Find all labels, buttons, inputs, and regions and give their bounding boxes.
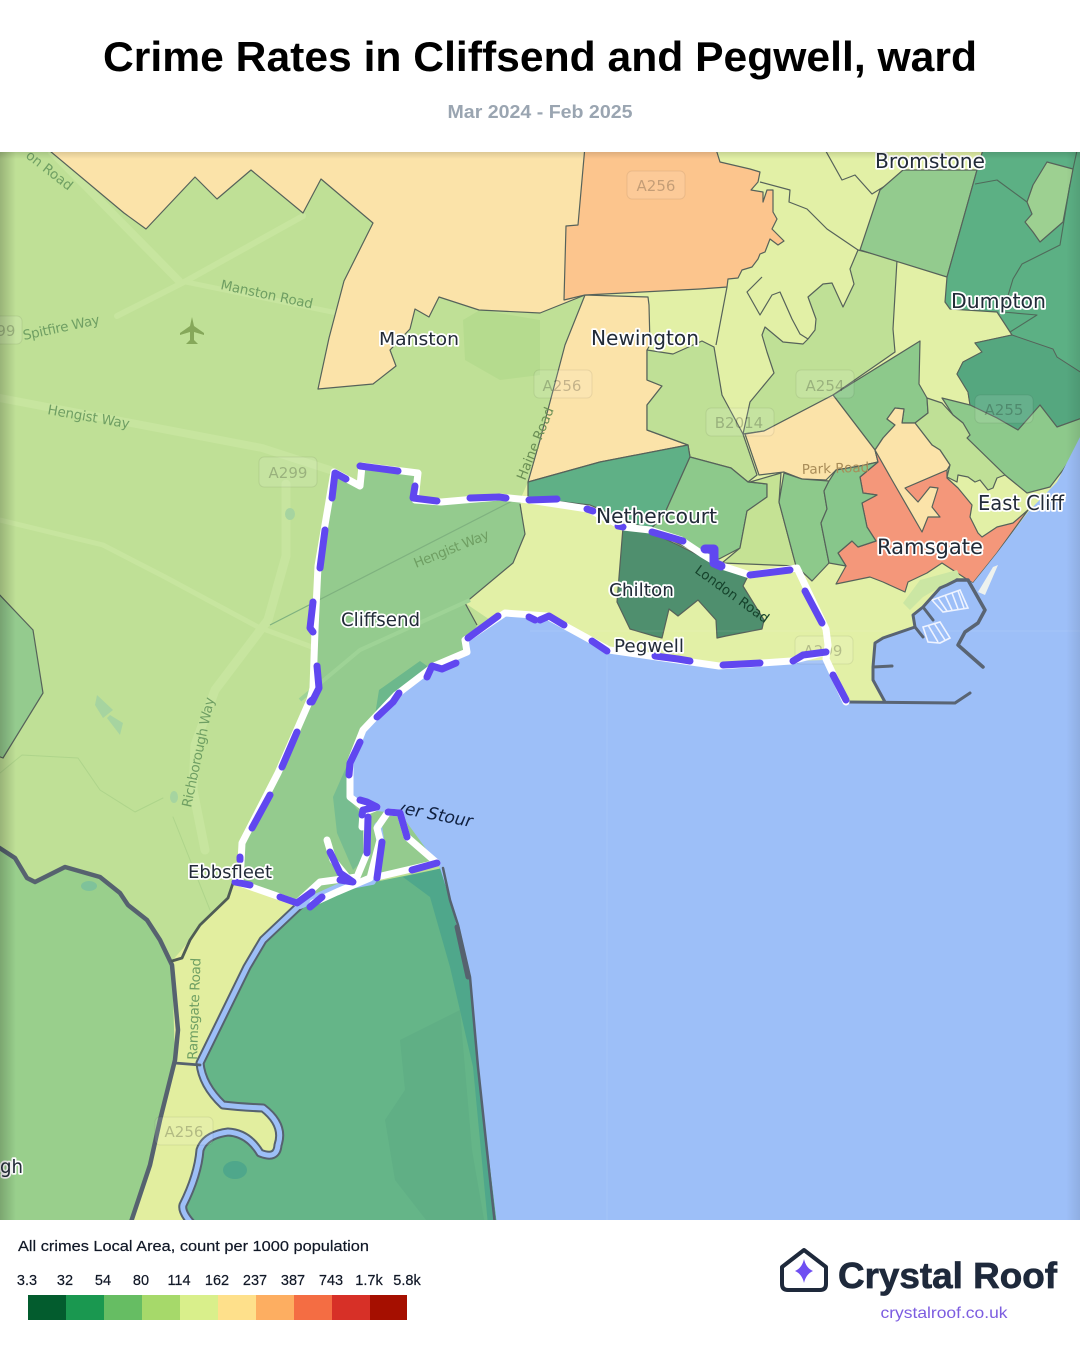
legend tick labels: 237: [243, 1273, 267, 1289]
place labels: Dumpton: [951, 289, 1046, 313]
zone: south lime: [722, 473, 796, 566]
road labels: [22, 148, 869, 1060]
zone: Chilton dark: [617, 527, 764, 638]
subtitle: date range: Mar 2024 - Feb 2025: [448, 102, 632, 122]
harbour hatch land: [903, 570, 960, 610]
road labels: Hengist Way: [46, 402, 131, 432]
road labels: Hengist Way: [412, 527, 492, 572]
icon: airport plane: [180, 317, 204, 344]
road shields: B2014: [715, 414, 763, 432]
road: Hengist Way through ward: [270, 497, 520, 625]
panel: western farmland roads: [0, 152, 337, 910]
zone: east dark patch: [957, 335, 1080, 430]
road shields: [0, 171, 1033, 1145]
zone: green block two: [821, 462, 878, 566]
zone: Nethercourt teal: [528, 445, 690, 530]
zone: upper right light green: [1025, 162, 1073, 242]
zone: lower-left green: [0, 847, 178, 1225]
road labels: Spitfire Way: [22, 312, 101, 344]
water: sea: [350, 430, 1080, 1225]
choropleth map: [0, 146, 1080, 1225]
beach sliver: [978, 565, 998, 595]
legend tick labels: 3.3: [17, 1273, 37, 1289]
legend tick labels: 162: [205, 1273, 229, 1289]
zone: central cream: [875, 408, 950, 532]
zone: Cliffsend ward green: [240, 466, 525, 905]
zone: north green: [860, 170, 977, 277]
logo: Crystal Roof: [782, 1250, 1058, 1322]
river Stour: [183, 826, 381, 1225]
zone: Cliffsend coastal teal strip: [333, 763, 363, 870]
legend tick labels: 387: [281, 1273, 305, 1289]
legend tick labels: 32: [57, 1273, 73, 1289]
ponds on farmland: [95, 508, 295, 803]
road labels: Park Road: [802, 460, 869, 478]
legend tick labels: [17, 1273, 421, 1289]
road shields: A299: [269, 464, 307, 482]
legend tick labels: 1.7k: [355, 1273, 383, 1289]
zone: Manston cream: [44, 146, 600, 389]
zone: central lime: [743, 250, 897, 434]
inner Dumpton boundaries: [975, 146, 1078, 332]
road shields: A254: [806, 377, 844, 395]
place labels: Pegwell: [614, 636, 684, 657]
place labels: [0, 149, 1065, 1178]
zone: marsh teal coast strip: [403, 868, 497, 1225]
legend title: All crimes Local Area, count per 1000 population: [18, 1238, 369, 1255]
place labels: Newington: [591, 326, 699, 350]
ward boundary: white casing: [240, 466, 846, 903]
road shields: A256: [165, 1123, 203, 1141]
zone: pale eastern base: [465, 146, 1080, 702]
pond: [223, 1161, 247, 1179]
road labels: Manston Road: [219, 277, 314, 312]
road shields: A256: [637, 177, 675, 195]
zone: Nethercourt green: [650, 457, 767, 559]
zone: green by A254: [833, 341, 928, 450]
legend tick labels: 5.8k: [393, 1273, 421, 1289]
place labels: Chilton: [609, 580, 674, 601]
road shields: A255: [985, 401, 1023, 419]
legend tick labels: 80: [133, 1273, 149, 1289]
place labels: Ebbsfleet: [188, 862, 272, 883]
marina berths: [923, 590, 968, 643]
harbour: [848, 570, 985, 703]
title: Crime Rates in Cliffsend and Pegwell, ward: [103, 33, 977, 80]
logo url: crystalroof.co.uk: [880, 1305, 1009, 1322]
place labels: Cliffsend: [341, 609, 420, 631]
zone: eastern green: [942, 398, 1080, 493]
place labels: East Cliff: [978, 491, 1065, 515]
zone: Ebbsfleet pale strip: [130, 882, 297, 1225]
road labels: Haine Road: [514, 405, 558, 482]
place labels: Bromstone: [875, 149, 985, 173]
zone: southern marsh green: [183, 868, 497, 1225]
label: River Stour: River Stour: [377, 794, 475, 832]
pale zone boundaries: [715, 152, 884, 346]
dual carriageway and boundary lines: [0, 845, 495, 1225]
zone: Newington cream: [528, 295, 688, 482]
place labels: gh: [0, 1156, 23, 1178]
zone: Ramsgate red: [836, 450, 1028, 592]
place labels: Nethercourt: [596, 504, 717, 528]
harbour walls: [848, 580, 985, 703]
zone: lime strip: [915, 398, 1005, 490]
ward boundary: purple dashes: [235, 466, 846, 907]
place labels: Ramsgate: [877, 535, 983, 559]
map edge shading: [0, 152, 1080, 1220]
legend: [17, 1238, 421, 1320]
legend tick labels: 54: [95, 1273, 111, 1289]
logo wordmark: Crystal Roof: [838, 1255, 1058, 1296]
zone: marsh darker patch: [385, 1010, 485, 1225]
legend tick labels: 743: [319, 1273, 343, 1289]
zone: green block one: [779, 473, 829, 581]
road labels: on Road: [23, 148, 76, 194]
icon: house with star: [782, 1250, 826, 1290]
road labels: Richborough Way: [179, 696, 218, 809]
zone: Park Road cream: [745, 395, 878, 480]
Cliffsend boundary with pale zone: [465, 504, 525, 625]
zone: Manston woodland patch: [463, 310, 540, 380]
road labels: London Road: [692, 562, 772, 627]
legend colour scale: [28, 1295, 407, 1320]
legend tick labels: 114: [167, 1273, 191, 1289]
zone: Newington right lime: [647, 341, 757, 482]
lower-left pond: [81, 881, 97, 891]
road shields: A299: [804, 642, 842, 660]
zone: far-left green: [0, 590, 43, 758]
road labels: Ramsgate Road: [185, 958, 205, 1060]
road shields: A256: [543, 377, 581, 395]
zone: orange high-crime area: [564, 146, 784, 300]
zone: Dumpton dark green: [944, 152, 1080, 404]
place labels: Manston: [379, 329, 459, 350]
zone: Cliffsend coastal patch: [376, 661, 428, 712]
